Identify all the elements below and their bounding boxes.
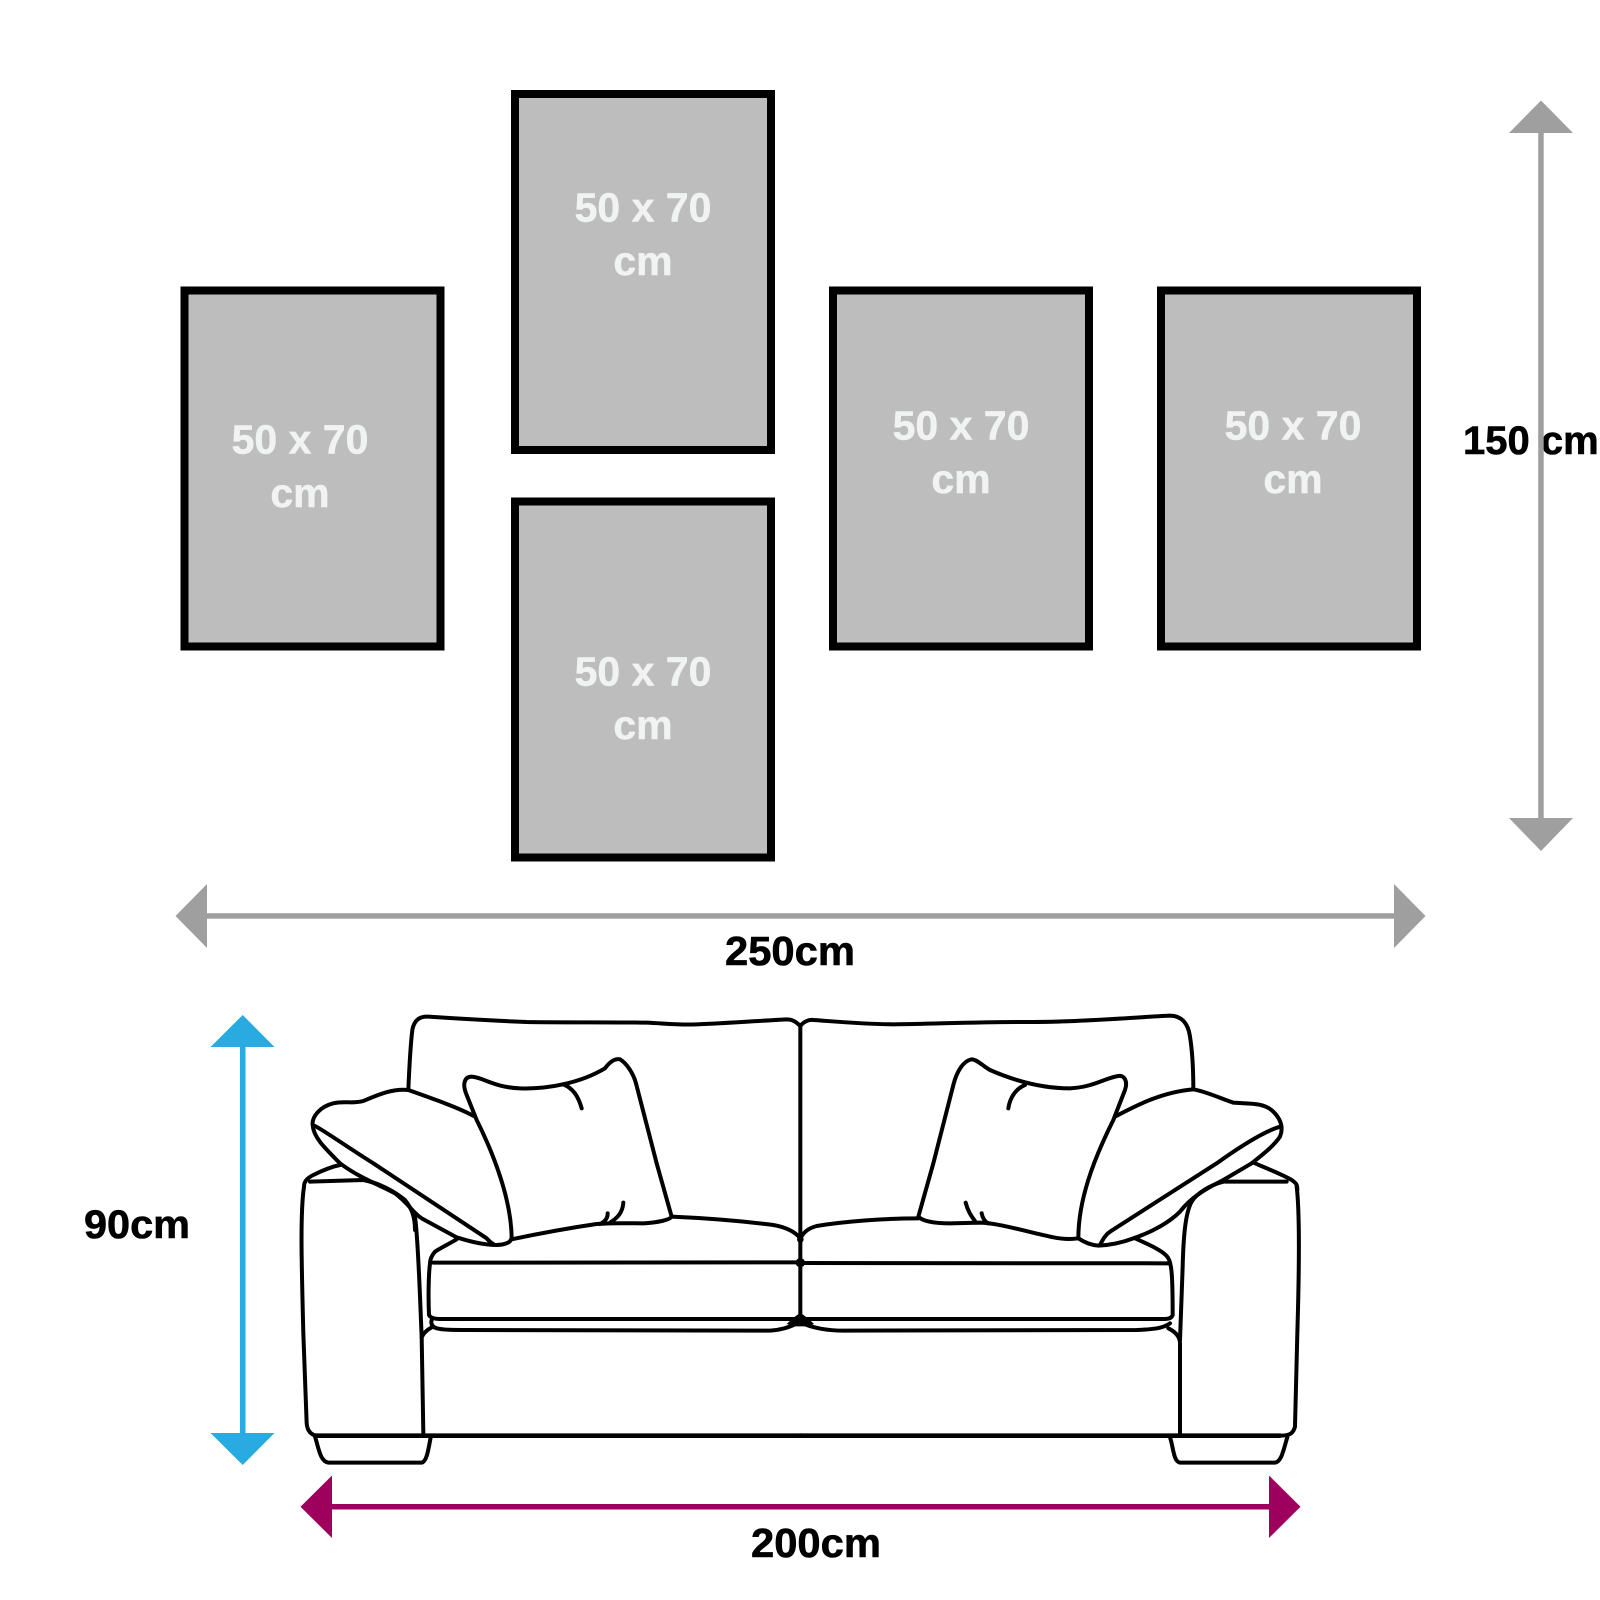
frame: fifth canvas xyxy=(1161,290,1417,646)
frame: bottom centre canvas: 50 x 70 xyxy=(575,648,711,694)
label: 90 cm sofa height: 90cm xyxy=(84,1203,190,1247)
frame: fifth canvas: cm xyxy=(1263,456,1323,502)
frame: fourth canvas: 50 x 70 xyxy=(893,402,1029,448)
label: 150 cm height: 150 cm xyxy=(1463,419,1599,463)
label: 200 cm sofa width: 200cm xyxy=(751,1520,881,1566)
frame: left canvas: 50 x 70 xyxy=(232,416,368,462)
frame: left canvas xyxy=(184,290,440,646)
sofa line drawing xyxy=(302,1016,1299,1463)
frame: top centre canvas: 50 x 70 xyxy=(575,184,711,230)
frame: left canvas: cm xyxy=(270,470,330,516)
sofa: left half xyxy=(302,1017,800,1463)
frame: top centre canvas: cm xyxy=(613,238,673,284)
frame: top centre canvas xyxy=(515,94,771,450)
arrow: 250 cm width xyxy=(176,884,1426,948)
sofa: right half xyxy=(787,1016,1299,1463)
arrow: 90 cm sofa height xyxy=(210,1015,274,1465)
frame: bottom centre canvas xyxy=(515,502,771,858)
arrow: 150 cm height xyxy=(1509,100,1573,851)
frame: fourth canvas: cm xyxy=(931,456,991,502)
arrow: 200 cm sofa width xyxy=(300,1476,1300,1538)
label: 250 cm width: 250cm xyxy=(725,928,855,974)
frame: fifth canvas: 50 x 70 xyxy=(1225,402,1361,448)
frame: fourth canvas xyxy=(833,290,1089,646)
frame: bottom centre canvas: cm xyxy=(613,702,673,748)
